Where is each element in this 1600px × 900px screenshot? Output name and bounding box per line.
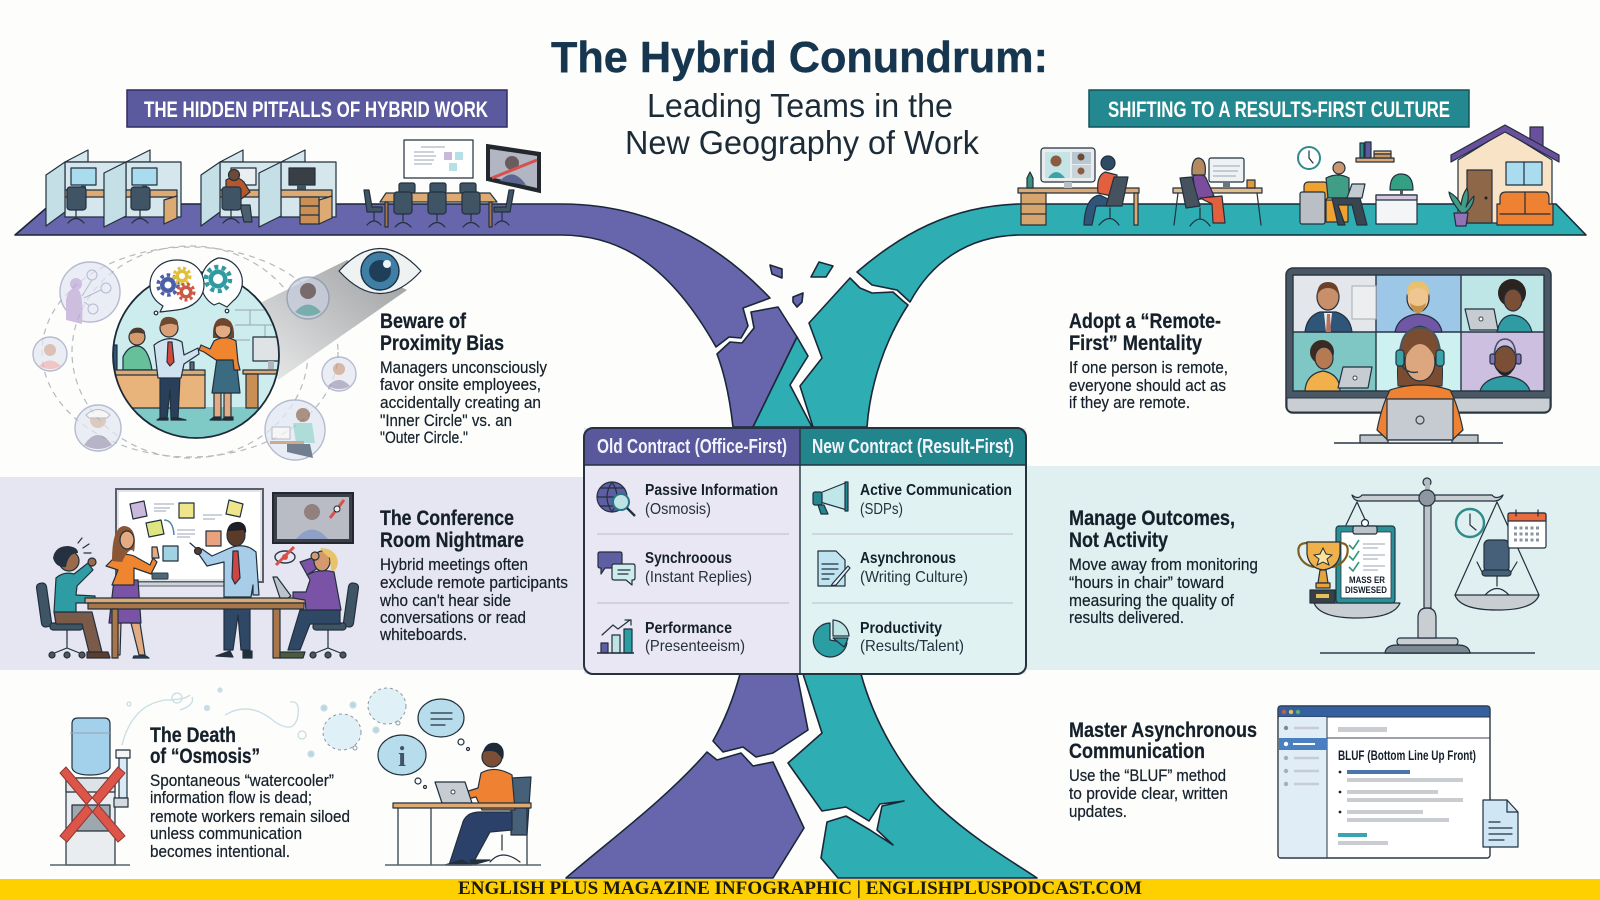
text: death of osmosis: The Death (150, 724, 236, 747)
foreground remote worker (1334, 326, 1503, 443)
text: master asynchronous communication (1069, 719, 1257, 821)
thought clouds (378, 699, 470, 788)
text: beware of proximity bias: "Inner Circle" vs. an (380, 411, 512, 430)
text: conference room nightmare: Hybrid meetings often (380, 555, 528, 574)
person: seated right (273, 548, 359, 658)
banner: hidden pitfalls: THE HIDDEN PITFALLS OF HYBRID WORK (144, 97, 488, 122)
sidebar (1279, 717, 1327, 858)
bullet list (1338, 770, 1463, 845)
thought bubbles with gears (150, 258, 242, 315)
office chair (1477, 540, 1517, 595)
house (1449, 125, 1559, 226)
left pan: results (1298, 502, 1400, 618)
text: conference room nightmare: The Conference (380, 507, 514, 530)
video tile: laptop user (1465, 279, 1532, 332)
video tile: woman with laptop (1305, 340, 1372, 391)
video tile: bearded man (1395, 281, 1442, 332)
desk with woman (1173, 158, 1262, 226)
text: conference room nightmare: whiteboards. (379, 625, 467, 644)
row: productivity (813, 620, 964, 657)
icon: bar chart (597, 620, 634, 653)
row: active communication (813, 482, 1012, 518)
text: manage outcomes: Not Activity (1069, 529, 1168, 552)
banner: results-first (1089, 90, 1469, 127)
illustration: remote workspaces (1018, 125, 1559, 226)
illustration: office cubicles (46, 150, 336, 227)
header: new contract: New Contract (Result-First) (812, 436, 1014, 458)
subtitle (625, 87, 979, 161)
path: teal results road (753, 204, 1586, 878)
video tile: man in suit (1305, 282, 1352, 332)
banner: results-first: SHIFTING TO A RESULTS-FIRST CULTURE (1108, 97, 1450, 122)
subtitle: New Geography of Work (625, 124, 979, 161)
row: passive information: (Osmosis) (645, 501, 711, 518)
row: passive information (597, 482, 778, 518)
clipboard: DISWESED (1345, 585, 1387, 595)
attention beam (262, 260, 407, 380)
text: master asynchronous communication: Communication (1069, 740, 1205, 763)
whiteboard with notes (116, 489, 263, 586)
illustration: water cooler crossed out (50, 718, 130, 865)
BLUF heading: BLUF (Bottom Line Up Front) (1338, 747, 1476, 763)
icon: document and pen (818, 551, 850, 586)
clock (1456, 509, 1484, 537)
text: conference room nightmare (379, 507, 568, 644)
remote participant screen (273, 493, 353, 543)
remote colleagues (33, 262, 356, 460)
icon: pie chart (813, 620, 849, 657)
row: asynchronous: Asynchronous (860, 550, 956, 567)
right pan: hours in chair (1455, 502, 1546, 610)
row: synchronous: Synchrooous (645, 550, 732, 567)
icon: eye (339, 248, 421, 294)
row: performance: Performance (645, 620, 732, 637)
row: asynchronous (818, 550, 968, 586)
row: active communication: Active Communication (860, 482, 1012, 499)
cubicle 2 (104, 150, 181, 227)
path: purple old-office road (15, 204, 808, 878)
row: productivity: Productivity (860, 620, 942, 637)
row: synchronous: (Instant Replies) (645, 569, 752, 586)
header: new contract (800, 428, 1026, 465)
text: manage outcomes: results delivered. (1069, 608, 1184, 627)
text: remote-first mentality: If one person is remote, (1069, 358, 1228, 377)
text: remote-first mentality: First” Mentality (1069, 332, 1202, 355)
clipboard (1336, 520, 1395, 603)
text: beware of proximity bias: "Outer Circle." (380, 428, 468, 447)
text: death of osmosis: Spontaneous “watercooler” (150, 771, 334, 790)
illustration: isolated remote worker (378, 699, 541, 865)
person: presenter (190, 522, 259, 658)
icon: megaphone (813, 482, 848, 514)
row: performance: (Presenteeism) (645, 638, 745, 655)
text: death of osmosis: information flow is dead; (150, 788, 312, 807)
text: death of osmosis: of “Osmosis” (150, 745, 260, 768)
band: conference room row (0, 477, 590, 670)
text: beware of proximity bias: Beware of (380, 310, 467, 333)
video tile: headset man (1480, 339, 1530, 391)
central office scene (112, 271, 280, 439)
text: master asynchronous communication: Use the “BLUF” method (1069, 766, 1226, 785)
illustration: balance scale (1298, 478, 1546, 653)
text: conference room nightmare: conversations or read (380, 608, 526, 627)
row: performance (597, 620, 745, 655)
row: productivity: (Results/Talent) (860, 638, 964, 655)
cubicle 3 with worker (201, 150, 280, 226)
illustration: dead information clouds (323, 688, 406, 750)
text: death of osmosis: remote workers remain siloed (150, 807, 350, 826)
footer band (0, 878, 1600, 900)
trophy (1298, 542, 1348, 603)
text: manage outcomes: Move away from monitoring (1069, 555, 1258, 574)
text: conference room nightmare: exclude remote participants (380, 573, 568, 592)
icon: red cross (60, 767, 125, 842)
header: old contract (584, 428, 800, 465)
comparison table (584, 428, 1026, 674)
cubicle 4 with drawers (259, 150, 336, 227)
lounge remote worker (1298, 142, 1417, 225)
row: passive information: Passive Information (645, 482, 778, 499)
text: remote-first mentality: Adopt a “Remote- (1069, 310, 1221, 333)
desk with video call (1018, 148, 1139, 225)
muted video screen (487, 145, 540, 192)
icon: document (1483, 800, 1518, 847)
meeting table (380, 193, 497, 227)
band: manage outcomes row (1020, 466, 1600, 670)
illustration: conference table with muted screen (364, 140, 540, 227)
banner: hidden pitfalls (127, 90, 507, 127)
text: manage outcomes: measuring the quality of (1069, 591, 1234, 610)
row: asynchronous: (Writing Culture) (860, 569, 968, 586)
text: remote-first mentality (1069, 310, 1228, 412)
gears (158, 267, 230, 300)
cubicle 1 (46, 150, 125, 226)
text: death of osmosis: unless communication (150, 824, 302, 843)
table (85, 598, 307, 658)
illustration: BLUF message window (1278, 706, 1518, 858)
title block (551, 33, 1048, 161)
illustration: proximity bias (33, 246, 421, 460)
title: The Hybrid Conundrum: (551, 33, 1048, 82)
text: beware of proximity bias (380, 310, 547, 447)
illustration: video call monitor (1286, 268, 1551, 443)
text: beware of proximity bias: favor onsite employees, (380, 375, 541, 394)
text: conference room nightmare: Room Nightmare (380, 529, 524, 552)
row: synchronous (598, 550, 752, 586)
text: remote-first mentality: if they are remote. (1069, 393, 1190, 412)
icon: crossed-out eye (275, 547, 295, 565)
text: manage outcomes (1069, 507, 1258, 627)
text: beware of proximity bias: accidentally creating an (380, 393, 541, 412)
whiteboard (404, 140, 473, 178)
person: seated left (36, 538, 110, 658)
calendar (1508, 510, 1546, 548)
text: beware of proximity bias: Proximity Bias (380, 332, 504, 355)
text: conference room nightmare: who can't hear side (379, 591, 511, 610)
header: old contract: Old Contract (Office-First) (597, 436, 787, 458)
orbit rings (42, 246, 338, 458)
illustration: swirling information flow (122, 688, 379, 757)
text: beware of proximity bias: Managers unconsciously (380, 358, 547, 377)
icon: chat bubbles (598, 552, 635, 585)
text: master asynchronous communication: Master Asynchronous (1069, 719, 1257, 742)
text: death of osmosis: becomes intentional. (150, 842, 290, 861)
chairs (364, 190, 514, 227)
text: master asynchronous communication: updates. (1069, 802, 1127, 821)
text: manage outcomes: “hours in chair” toward (1069, 573, 1224, 592)
text: manage outcomes: Manage Outcomes, (1069, 507, 1235, 530)
person: woman at whiteboard (106, 526, 159, 658)
icon: globe with magnifier (597, 482, 635, 516)
footer band: ENGLISH PLUS MAGAZINE INFOGRAPHIC | ENGLISHPLUSPODCAST.COM (458, 878, 1142, 899)
clipboard: MASS ER (1349, 575, 1385, 585)
thought clouds: i (398, 742, 406, 773)
illustration: conference room nightmare (36, 489, 359, 658)
text: master asynchronous communication: to provide clear, written (1069, 784, 1228, 803)
subtitle: Leading Teams in the (647, 87, 953, 124)
text: death of osmosis (150, 724, 350, 861)
row: active communication: (SDPs) (860, 501, 903, 518)
text: remote-first mentality: everyone should act as (1069, 376, 1226, 395)
